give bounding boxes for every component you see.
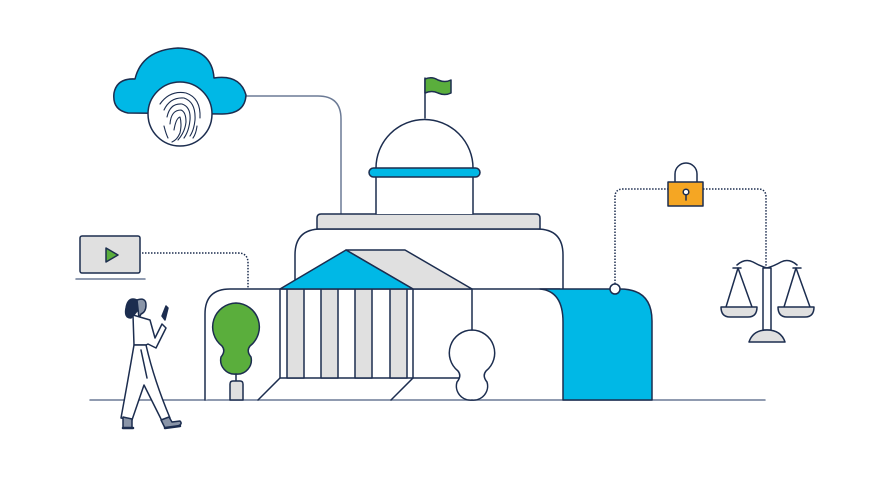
building: right blue wing — [540, 289, 652, 400]
person walking with phone — [121, 299, 181, 428]
connector: cloud to building — [246, 96, 341, 214]
icon: scales of justice — [721, 261, 814, 342]
icon: green tree — [213, 303, 259, 400]
connector: video to building (dotted) — [142, 253, 248, 289]
icon: white tree — [449, 289, 495, 400]
building: left wing — [205, 289, 560, 400]
icon: cloud with fingerprint — [114, 48, 246, 146]
icon: video player — [76, 236, 145, 279]
building: dome with flag — [369, 78, 480, 214]
building: middle block — [295, 214, 563, 289]
icon: padlock — [668, 163, 703, 206]
junction dot — [610, 284, 620, 294]
building: portico with columns — [258, 250, 472, 400]
connector: lock dotted lines — [615, 189, 766, 284]
ground line — [90, 399, 765, 401]
